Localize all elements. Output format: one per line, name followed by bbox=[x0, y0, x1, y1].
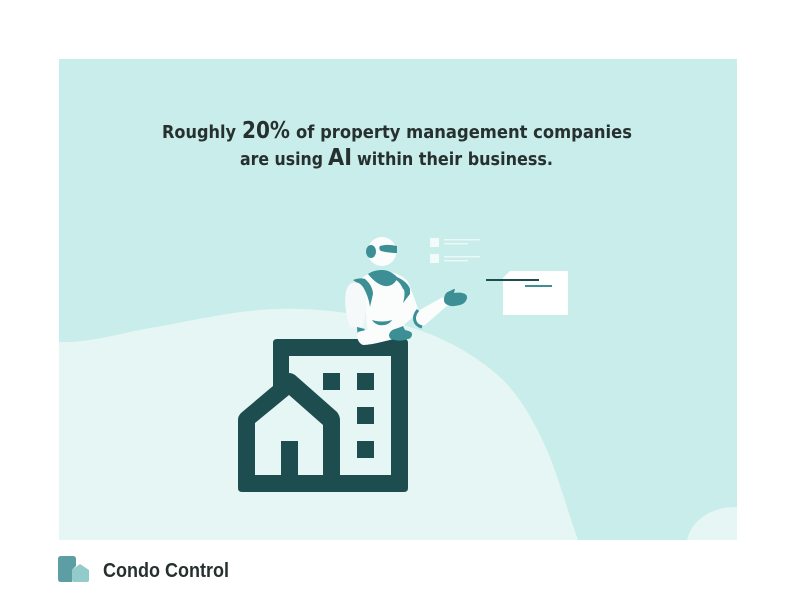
heading line 2: are using bbox=[240, 150, 323, 170]
robot resting hand bbox=[389, 326, 412, 341]
robot waist bbox=[372, 320, 392, 325]
logo bbox=[58, 556, 229, 582]
robot hip joint bbox=[357, 327, 365, 340]
robot legs bbox=[357, 327, 398, 345]
card dark line bbox=[486, 279, 539, 281]
robot visor bbox=[379, 245, 397, 253]
list item two bbox=[430, 254, 480, 263]
heading line 1: 20% bbox=[242, 118, 290, 144]
heading line 1: of property management companies bbox=[296, 123, 632, 143]
panel: teal background bbox=[59, 59, 737, 540]
heading line 1: Roughly bbox=[162, 123, 237, 143]
logo icon: tall building bbox=[58, 556, 76, 582]
heading bbox=[162, 118, 632, 171]
robot bbox=[345, 237, 467, 345]
icon: building and house bbox=[238, 339, 408, 492]
floating list items bbox=[430, 238, 480, 263]
logo icon: small house bbox=[72, 564, 89, 582]
heading line 2: within their business. bbox=[357, 150, 553, 170]
robot far arm bbox=[414, 297, 448, 326]
list item one bbox=[430, 238, 480, 247]
robot torso bbox=[358, 272, 419, 334]
robot chest plate bbox=[368, 270, 397, 286]
robot shoulder stripe left bbox=[353, 278, 373, 307]
heading line 2: AI bbox=[328, 145, 352, 171]
corner hill bbox=[687, 507, 737, 540]
card body bbox=[503, 271, 568, 315]
building and house outline bbox=[238, 339, 408, 492]
card teal line bbox=[525, 285, 552, 287]
robot side stripe right bbox=[396, 277, 410, 303]
logo wordmark: Condo Control bbox=[103, 559, 229, 582]
robot open hand bbox=[444, 289, 467, 306]
robot wrist bbox=[415, 310, 422, 327]
background hill bbox=[59, 309, 578, 540]
robot head bbox=[368, 237, 396, 266]
floating card bbox=[486, 271, 568, 315]
building windows bbox=[323, 373, 374, 458]
robot left arm bbox=[345, 282, 366, 327]
robot ear bbox=[366, 245, 376, 258]
